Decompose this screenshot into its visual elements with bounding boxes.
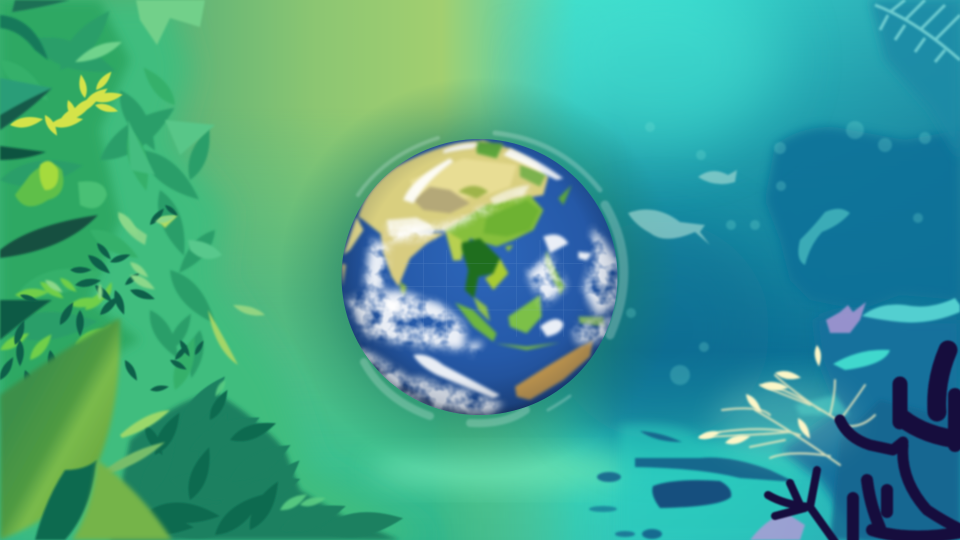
seabed xyxy=(620,424,800,540)
glowing sea fan xyxy=(715,380,855,460)
dark coral xyxy=(768,350,960,540)
reef mound xyxy=(780,310,960,540)
solid clouds xyxy=(387,143,592,398)
fish xyxy=(628,170,737,245)
lower dark bush xyxy=(110,392,400,540)
lime leaves xyxy=(0,276,115,363)
graticule xyxy=(403,240,583,337)
panel: forest foliage on the left xyxy=(0,0,430,540)
small light leaves xyxy=(43,209,177,300)
soft bubbles and streaks xyxy=(626,121,931,385)
bright green leaves xyxy=(0,53,202,393)
large foreground leaf xyxy=(0,318,120,540)
foliage base xyxy=(0,0,430,540)
ocean disc xyxy=(342,139,618,415)
icon: Earth globe xyxy=(342,139,620,430)
teal ribbons xyxy=(862,298,960,323)
fern at top right xyxy=(875,0,960,62)
small dark leaves xyxy=(0,203,206,414)
mid-tone leaves xyxy=(0,4,223,379)
icon: glass rings around the globe xyxy=(358,133,624,423)
panel: ocean scene on the right xyxy=(589,0,960,540)
rock silhouette xyxy=(765,127,960,310)
yellow fern xyxy=(9,69,124,138)
land masses xyxy=(342,140,605,400)
limb shading xyxy=(342,139,618,415)
stormy rim at lower left xyxy=(372,364,476,415)
top leaves xyxy=(0,0,265,475)
purple coral xyxy=(750,302,866,540)
textured clouds xyxy=(347,185,620,417)
